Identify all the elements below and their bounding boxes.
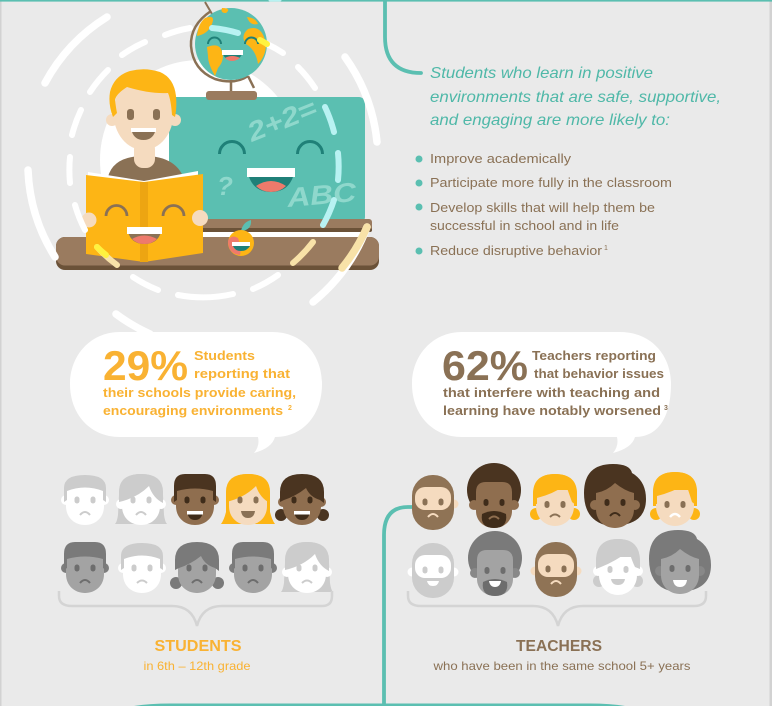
label: teachers: TEACHERS <box>516 638 602 655</box>
face: bearded teacher frown <box>412 475 458 530</box>
face: grey afro woman teacher smile <box>649 530 711 594</box>
chalkboard: ? <box>217 171 233 201</box>
face: student grey boy frown 2 <box>118 543 166 593</box>
face: grey bearded teacher smile <box>408 543 458 598</box>
callout: students 29%: encouraging environments <box>103 404 283 418</box>
face: student grey boy frown <box>61 475 109 525</box>
label: teachers: who have been in the same school 5+ years <box>432 659 690 673</box>
callout: students 29%: reporting that <box>194 367 291 381</box>
chalkboard: ABC <box>285 177 358 213</box>
face: student dark grey boy frown <box>61 542 109 593</box>
top teal rule <box>0 0 772 2</box>
callout: students 29%: their schools provide caring, <box>103 386 296 400</box>
connector: teachers to bottom panel <box>384 507 412 706</box>
callout: students 29% <box>70 332 322 453</box>
callout: teachers 62%: 3 <box>664 405 668 412</box>
face: blonde teacher frown 2 <box>650 472 700 526</box>
globe <box>191 2 267 100</box>
benefits list: Reduce disruptive behavior <box>430 243 603 258</box>
benefits list: Develop skills that will help them be <box>430 200 655 215</box>
label: students: in 6th – 12th grade <box>144 659 251 673</box>
intro text: Students who learn in positive <box>430 65 653 82</box>
open book <box>82 171 208 262</box>
label: teachers <box>432 638 690 673</box>
boy reading <box>106 69 185 182</box>
intro text <box>430 65 721 129</box>
teacher faces <box>408 463 711 598</box>
face: grey woman teacher smile <box>593 539 643 595</box>
brace: teachers <box>408 591 706 626</box>
intro text: environments that are safe, supportive, <box>430 89 721 106</box>
callout: teachers 62%: learning have notably worsened <box>443 404 661 418</box>
benefits list: Participate more fully in the classroom <box>430 175 672 190</box>
intro text: and engaging are more likely to: <box>430 112 670 129</box>
callout: teachers 62% <box>412 332 671 453</box>
orange <box>228 220 254 256</box>
face: grey afro teacher smile <box>468 531 522 596</box>
benefits list: 1 <box>604 245 608 252</box>
callout: students 29%: 2 <box>288 405 292 412</box>
callout: teachers 62%: Teachers reporting <box>532 349 656 363</box>
face: student dark grey girl frown <box>170 542 224 593</box>
student faces <box>61 474 333 593</box>
bottom panel edge <box>134 704 625 706</box>
face: student dark boy smile <box>171 474 219 525</box>
face: afro woman teacher frown <box>584 464 646 528</box>
callout: students 29%: Students <box>194 349 255 363</box>
label: students <box>144 638 251 673</box>
face: student grey girl frown 2 <box>281 542 333 593</box>
chalkboard <box>169 93 365 223</box>
face: bearded teacher frown 2 <box>530 542 582 597</box>
connector: top to intro text <box>385 0 421 73</box>
decorative rings <box>28 0 377 334</box>
face: student blonde girl smile <box>221 474 275 525</box>
face: afro bearded teacher frown <box>467 463 521 528</box>
callout: teachers 62%: that interfere with teaching and <box>443 386 660 400</box>
brace: students <box>59 591 332 626</box>
chalk tray <box>200 219 372 232</box>
callout: teachers 62%: that behavior issues <box>534 367 664 381</box>
chalkboard: 2+2= <box>242 93 321 148</box>
callout: teachers 62%: 62% <box>442 342 528 389</box>
illustration: classroom <box>56 2 379 270</box>
face: student grey girl frown <box>115 474 167 525</box>
callout: students 29%: 29% <box>103 342 188 389</box>
benefits list: successful in school and in life <box>430 218 619 233</box>
face: student dark girl smile <box>275 474 329 525</box>
face: blonde teacher frown <box>530 474 580 526</box>
face: student dark grey boy frown 2 <box>229 542 277 593</box>
label: students: STUDENTS <box>154 638 242 655</box>
desk <box>56 237 379 270</box>
benefits list: Improve academically <box>430 151 572 166</box>
benefits list <box>416 151 672 258</box>
